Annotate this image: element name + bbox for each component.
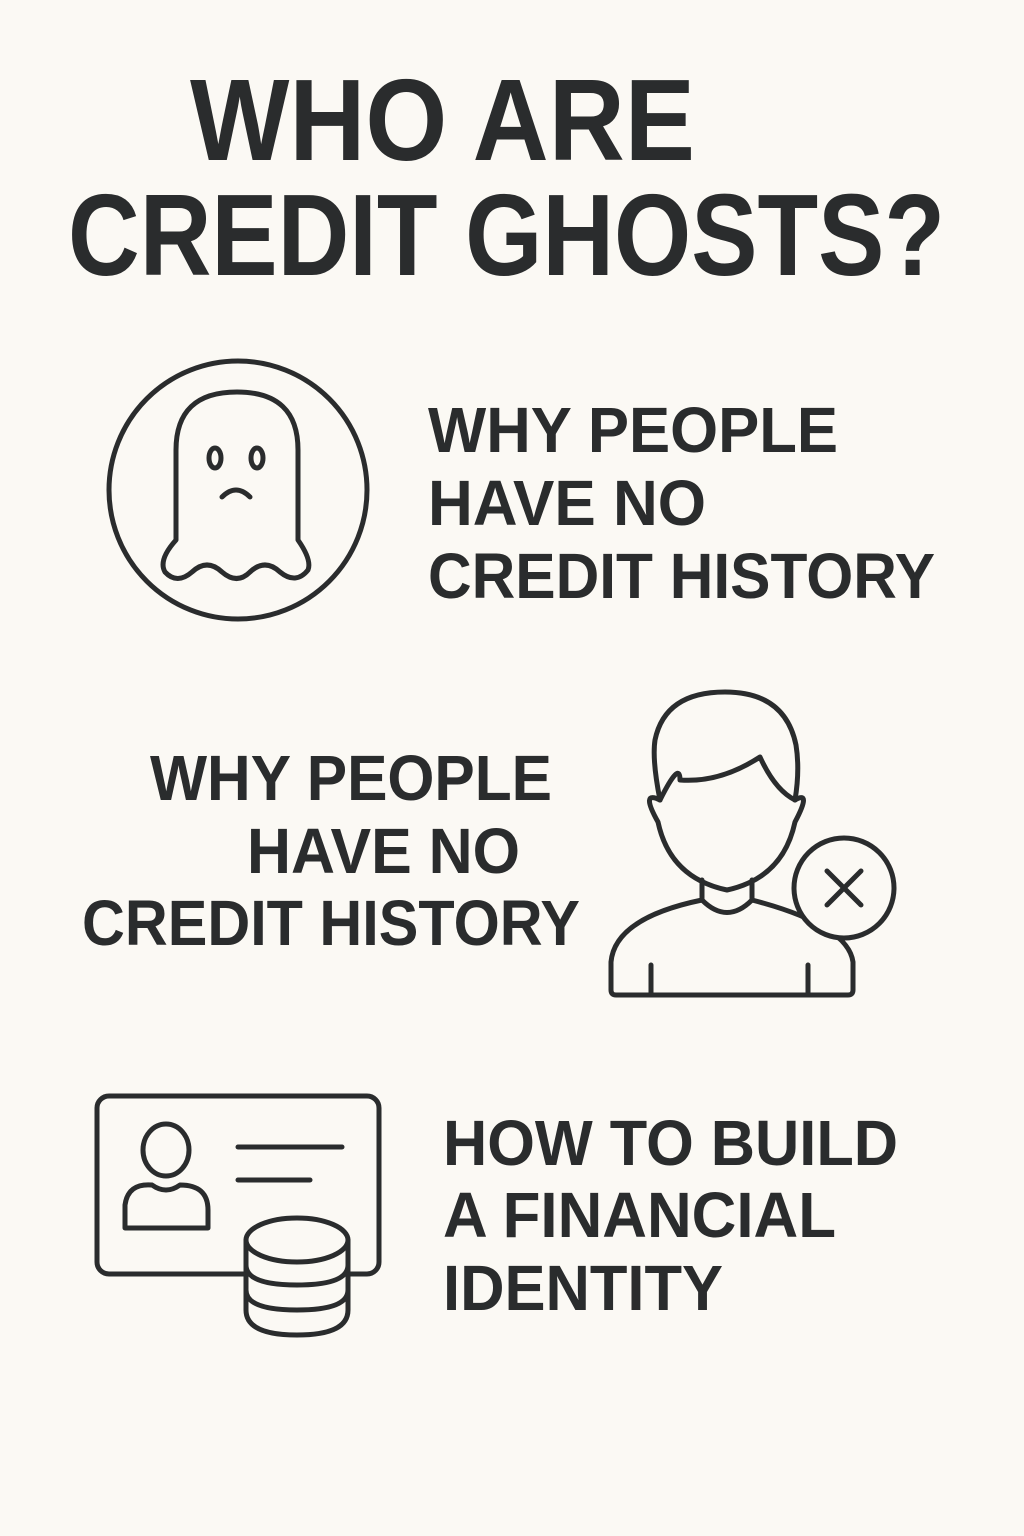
icon: ghost in circle (109, 361, 367, 619)
text: why people have no credit history (1): CREDIT HISTORY (428, 540, 935, 612)
text: how to build a financial identity: A FINANCIAL (443, 1179, 836, 1251)
text: why people have no credit history (1): WHY PEOPLE (428, 394, 838, 466)
text: why people have no credit history (2) (82, 742, 580, 959)
text: how to build a financial identity: HOW TO BUILD (443, 1107, 898, 1179)
text: how to build a financial identity (443, 1107, 898, 1324)
title (68, 55, 945, 300)
text: why people have no credit history (2): CREDIT HISTORY (82, 887, 580, 959)
text: why people have no credit history (2): WHY PEOPLE (150, 742, 552, 814)
icon: person with x (611, 692, 894, 995)
title: WHO ARE (190, 55, 695, 185)
text: why people have no credit history (1): HAVE NO (428, 467, 706, 539)
text: why people have no credit history (2): HAVE NO (247, 815, 520, 887)
icon: ID card with coins (97, 1096, 379, 1335)
text: why people have no credit history (1) (428, 394, 935, 612)
text: how to build a financial identity: IDENTITY (443, 1252, 723, 1324)
